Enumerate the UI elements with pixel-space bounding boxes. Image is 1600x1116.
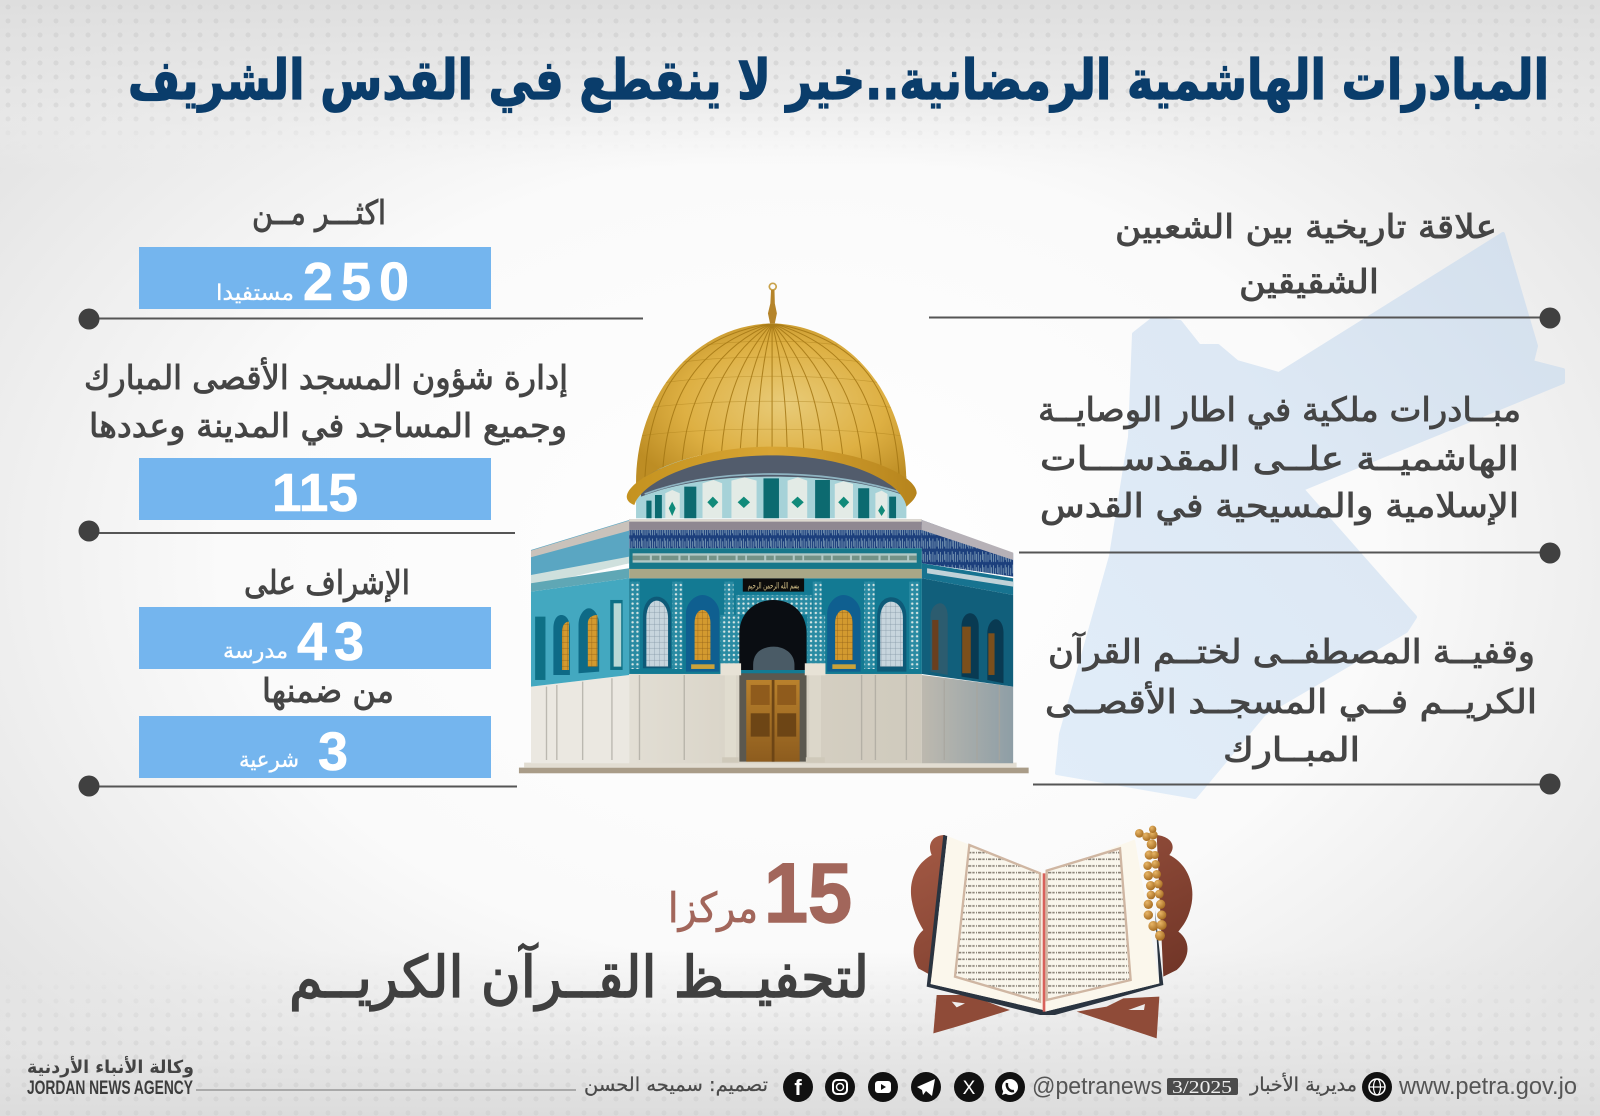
footer: date badge: 3/2025: [1172, 1077, 1232, 1097]
central portal: بسم الله الرحمن الرحيم: [748, 581, 799, 591]
right page text: [1047, 848, 1131, 1000]
stat box: 250 beneficiaries: [139, 247, 491, 312]
footer: social icons: X: [963, 1078, 976, 1099]
drum: [636, 450, 906, 518]
callout: 15 centres: مركزا: [668, 884, 758, 932]
text: Mustafa waqf: وقفيــة المصطفــى لختــم القرآن: [1048, 632, 1535, 671]
stand back: [911, 835, 1192, 977]
callout: 15 centres: لتحفيــظ القــرآن الكريــم: [289, 943, 869, 1011]
text: royal initiatives: [1038, 390, 1521, 525]
footer: agency logo: JORDAN NEWS AGENCY: [27, 1078, 193, 1099]
text: Al-Aqsa management: إدارة شؤون المسجد الأقصى المبارك: [84, 357, 568, 398]
text: Mustafa waqf: المبــارك: [1223, 730, 1360, 769]
stat box: 43 schools: 43: [297, 612, 364, 672]
book cover: [927, 835, 1163, 1015]
divider with dot 3: [1033, 774, 1560, 794]
divider with dot 1: [78, 308, 643, 330]
footer: website: www.petra.gov.jo: [1398, 1073, 1577, 1100]
prayer beads: [1135, 826, 1167, 941]
stat box: 250 beneficiaries: 250: [303, 252, 409, 312]
tiled middle walls: [531, 578, 1013, 687]
text: Al-Aqsa management: وجميع المساجد في المدينة وعددها: [89, 406, 567, 445]
footer: globe icon: [1362, 1072, 1392, 1102]
stat box: 115: 115: [272, 463, 358, 523]
stat box: 115: [139, 458, 491, 523]
footer: designer credit: تصميم: سميحه الحسن: [584, 1074, 768, 1096]
stat box: 3 sharia: شرعية: [239, 748, 299, 773]
illustration: Dome of the Rock: [519, 283, 1029, 773]
stat box: 3 sharia: 3: [318, 722, 348, 782]
divider with dot 3: [78, 776, 517, 796]
golden dome: [627, 323, 917, 507]
callout: 15 centres: [289, 846, 869, 1011]
divider with dot 2: [78, 520, 515, 542]
footer: social icons: f: [794, 1075, 802, 1100]
footer: social icons: [783, 1072, 1025, 1102]
stat box: 3 sharia: [139, 716, 491, 782]
label: more than: اكثـــر مــن: [252, 193, 386, 232]
left page text: [955, 845, 1040, 1002]
finial: [768, 283, 777, 323]
base plinth: [519, 763, 1029, 773]
divider with dot 2: [1019, 542, 1560, 564]
stat box: 250 beneficiaries: مستفيدا: [216, 281, 294, 306]
text: Al-Aqsa management: [84, 357, 568, 445]
text: historic relation: [1115, 207, 1497, 301]
text: royal initiatives: مبــادرات ملكية في اطار الوصايــة: [1038, 390, 1521, 429]
map of Jordan watermark: [1057, 234, 1563, 797]
text: Mustafa waqf: الكريــم فــي المسجــد الأقصــى: [1045, 681, 1537, 721]
footer: agency logo: وكالة الأنباء الأردنية: [27, 1056, 194, 1078]
central portal: [720, 578, 825, 763]
left page: [931, 836, 1043, 1010]
text: historic relation: الشقيقين: [1239, 262, 1379, 301]
divider with dot 1: [929, 308, 1560, 328]
upper octagon frieze: [531, 519, 1013, 595]
text: historic relation: علاقة تاريخية بين الشعبين: [1115, 207, 1497, 246]
label: among them: من ضمنها: [262, 671, 394, 710]
stone lower walls: [531, 673, 1013, 763]
illustration: open Quran on wooden stand: [911, 826, 1192, 1038]
footer: news directorate: مديرية الأخبار: [1249, 1073, 1357, 1096]
left panel: beneficiaries: [78, 193, 643, 796]
stat box: 43 schools: مدرسة: [223, 639, 288, 664]
footer: agency logo: [27, 1056, 576, 1099]
label: supervision of: الإشراف على: [244, 563, 410, 602]
stat box: 43 schools: [139, 607, 491, 672]
callout: 15 centres: 15: [764, 846, 852, 940]
stand legs: [933, 995, 1159, 1038]
right page: [1045, 839, 1159, 1012]
windows: [535, 595, 1004, 683]
right panel: initiatives: [929, 207, 1560, 794]
text: royal initiatives: الإسلامية والمسيحية في القدس: [1040, 486, 1519, 525]
text: royal initiatives: الهاشميــة علــى المقدســـات: [1040, 439, 1519, 478]
text: Mustafa waqf: [1045, 632, 1537, 769]
ribbon: [1043, 873, 1045, 1012]
footer: handle: @petranews: [1032, 1073, 1162, 1100]
